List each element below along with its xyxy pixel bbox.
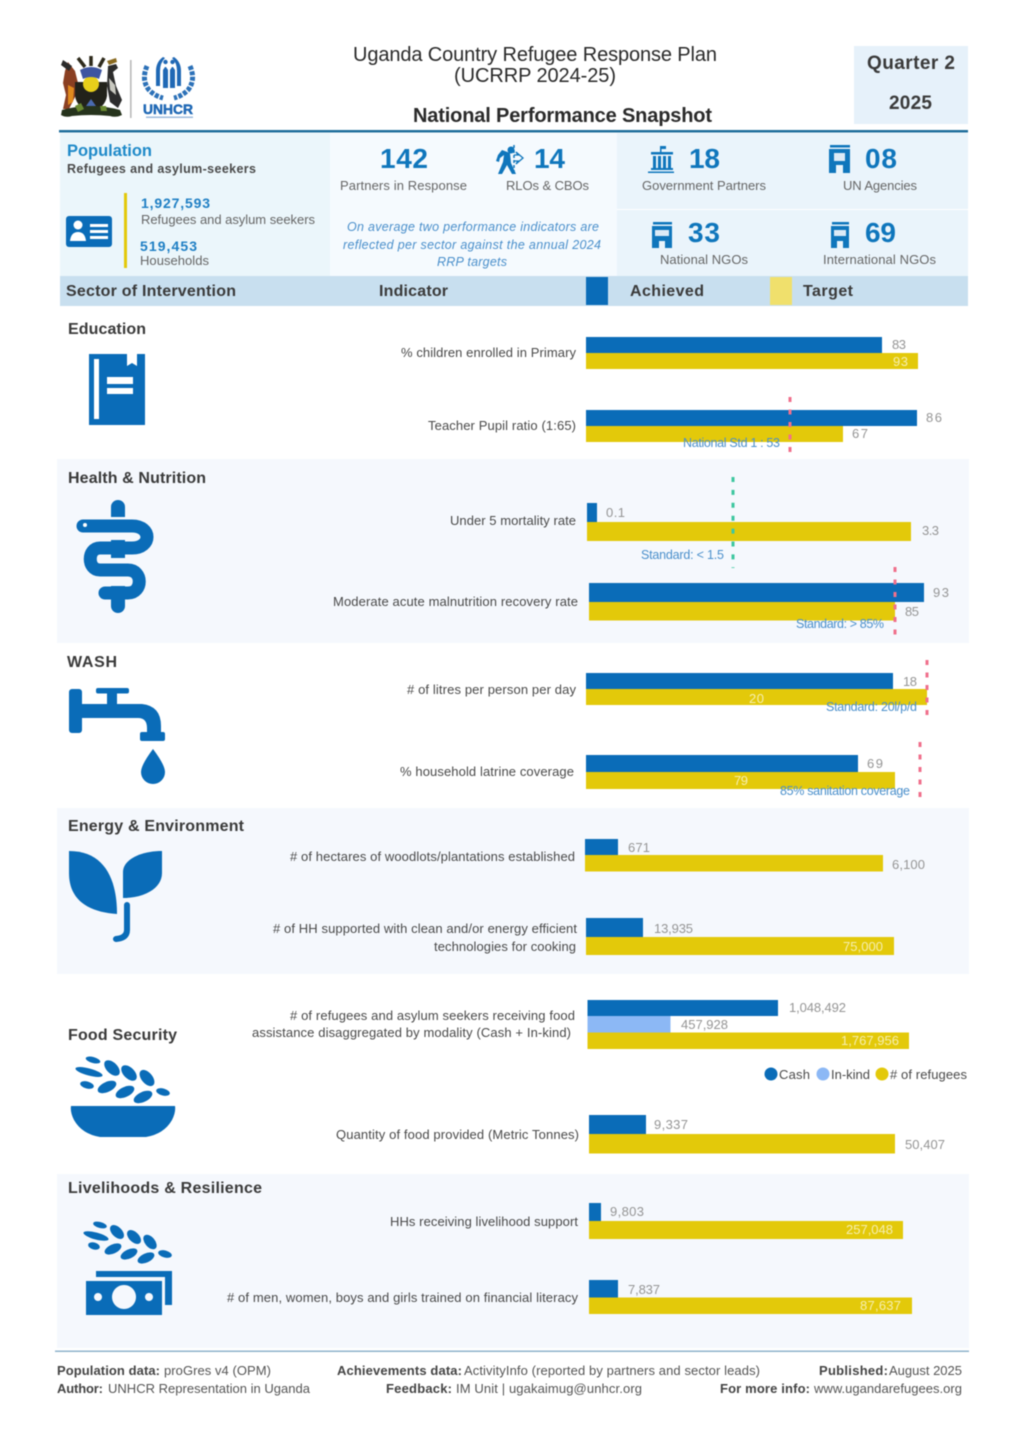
indicator: livelihood support: 9,803 — [610, 1204, 644, 1219]
indicator: clean energy: 75,000 — [843, 939, 883, 954]
footer: Author: — [57, 1381, 103, 1396]
panel: health and nutrition — [57, 459, 969, 643]
panel: population: 1,927,593 — [141, 195, 210, 211]
legend: # of refugees — [890, 1067, 968, 1082]
indicator: malnutrition recovery — [333, 567, 949, 635]
panel: partner types: 33 — [688, 217, 720, 248]
logo wordmark: UNHCR — [143, 101, 193, 117]
indicator: under 5 mortality — [450, 477, 939, 568]
panel: partner types: Government Partners — [642, 178, 766, 193]
indicator: teacher pupil ratio: 86 — [926, 410, 942, 425]
panel: population: Refugees and asylum seekers — [141, 212, 316, 227]
icon: ID card — [66, 216, 112, 247]
panel: population: Households — [140, 253, 210, 268]
panel: partner types: 18 — [689, 143, 720, 174]
indicator: malnutrition recovery: Standard: > 85% — [796, 617, 884, 631]
panel: partner types: International NGOs — [823, 252, 936, 267]
title: Uganda Country Refugee Response Plan — [353, 44, 717, 66]
footer: For more info: — [720, 1381, 810, 1396]
table header strip: Target — [803, 283, 854, 300]
divider between logos — [130, 60, 132, 118]
indicator: financial literacy — [227, 1280, 912, 1314]
panel: population: Refugees and asylum-seekers — [67, 162, 256, 176]
indicator: litres per person: Standard: 20l/p/d — [826, 700, 917, 714]
icon: international NGO building — [831, 222, 849, 248]
indicator: litres per person: # of litres per person per day — [407, 682, 576, 697]
icon: UN building — [829, 145, 850, 173]
panel: WASH: WASH — [67, 654, 117, 671]
icon: runner at signpost — [496, 145, 523, 175]
indicator: livelihood support: HHs receiving livelihood support — [390, 1214, 578, 1229]
indicator: food quantity: 50,407 — [905, 1137, 945, 1152]
indicator: under 5 mortality: Under 5 mortality rate — [450, 513, 576, 528]
panel: partners in response: Partners in Response — [340, 178, 467, 193]
icon: government building — [648, 146, 674, 173]
panel: partners in response: RLOs & CBOs — [506, 178, 590, 193]
indicator: malnutrition recovery: Moderate acute malnutrition recovery rate — [333, 594, 578, 609]
indicator: clean energy — [273, 918, 894, 955]
quarter badge: 2025 — [889, 93, 932, 114]
indicator: food quantity: 9,337 — [654, 1117, 688, 1132]
indicator: teacher pupil ratio: 67 — [852, 426, 868, 441]
indicator: livelihood support: 257,048 — [846, 1222, 893, 1237]
indicator: clean energy: 13,935 — [654, 921, 693, 936]
table header strip: Indicator — [379, 283, 448, 300]
indicator: teacher pupil ratio: Teacher Pupil ratio (1:65) — [428, 418, 576, 433]
table header strip: Sector of Intervention — [66, 283, 236, 300]
logo: UNHCR — [143, 57, 193, 118]
indicator: food assistance recipients: assistance disaggregated by modality (Cash + In-kind) — [252, 1025, 571, 1040]
indicator: clean energy: technologies for cooking — [434, 939, 576, 954]
indicator: woodlots — [290, 839, 925, 872]
indicator: litres per person: 18 — [903, 674, 917, 689]
panel: partners in response — [330, 133, 617, 276]
note: RRP targets — [437, 255, 507, 269]
indicator: litres per person — [407, 660, 927, 715]
panel: partner types: UN Agencies — [843, 178, 918, 193]
title: (UCRRP 2024-25) — [454, 65, 616, 87]
header rule — [59, 130, 968, 132]
icon: bowl with grain — [71, 1055, 175, 1137]
footer: August 2025 — [889, 1363, 962, 1378]
panel: food security: Food Security — [68, 1027, 177, 1044]
indicator: latrine coverage: 85% sanitation coverage — [780, 784, 910, 798]
icon: book — [89, 354, 145, 425]
footer: proGres v4 (OPM) — [164, 1363, 271, 1378]
panel: population: Population — [67, 142, 152, 160]
indicator: food assistance recipients: 457,928 — [681, 1017, 728, 1032]
footer: Feedback: — [386, 1381, 452, 1396]
panel: partners in response: 142 — [380, 143, 428, 174]
panel: food security — [68, 1000, 968, 1154]
title: National Performance Snapshot — [413, 105, 712, 127]
panel: population — [60, 133, 330, 276]
table header strip: Achieved — [630, 283, 704, 300]
indicator: malnutrition recovery: 93 — [933, 585, 949, 600]
icon: leaves — [69, 851, 162, 939]
indicator: litres per person: 20 — [749, 691, 764, 706]
footer: Population data: — [57, 1363, 160, 1378]
footer: UNHCR Representation in Uganda — [108, 1381, 311, 1396]
indicator: children enrolled in primary — [401, 337, 918, 369]
indicator: woodlots: # of hectares of woodlots/plantations established — [290, 849, 575, 864]
title — [353, 44, 717, 127]
indicator: under 5 mortality: Standard: < 1.5 — [641, 548, 724, 562]
note: On average two performance indicators are — [347, 220, 599, 234]
indicator: food quantity: Quantity of food provided (Metric Tonnes) — [336, 1127, 579, 1142]
icon: tap and drop — [69, 688, 165, 784]
indicator: children enrolled in primary: % children enrolled in Primary — [401, 345, 576, 360]
panel: partner types: National NGOs — [660, 252, 748, 267]
indicator: financial literacy: 7,837 — [628, 1282, 660, 1297]
indicator: food assistance recipients — [252, 1000, 909, 1049]
panel: livelihoods and resilience — [57, 1174, 969, 1348]
indicator: latrine coverage: 69 — [867, 756, 883, 771]
indicator: under 5 mortality: 0.1 — [606, 505, 625, 520]
panel: health and nutrition: Health & Nutrition — [68, 470, 206, 487]
icon: grain and money — [83, 1220, 173, 1315]
indicator: food assistance recipients: 1,767,956 — [841, 1033, 899, 1048]
indicator: latrine coverage — [400, 742, 920, 798]
indicator: clean energy: # of HH supported with clean and/or energy efficient — [273, 921, 577, 936]
indicator: food assistance recipients: 1,048,492 — [789, 1000, 846, 1015]
panel: education — [68, 321, 942, 453]
indicator: woodlots: 6,100 — [892, 857, 925, 872]
indicator: financial literacy: 87,637 — [860, 1298, 901, 1313]
indicator: malnutrition recovery: 85 — [905, 604, 919, 619]
indicator: teacher pupil ratio — [428, 397, 942, 453]
legend: Cash — [779, 1067, 810, 1082]
indicator: livelihood support — [390, 1203, 903, 1239]
indicator: teacher pupil ratio: National Std 1 : 53 — [683, 436, 780, 450]
note — [343, 220, 601, 269]
icon: national NGO building — [652, 222, 672, 248]
quarter badge: Quarter 2 — [867, 53, 955, 74]
panel: livelihoods and resilience: Livelihoods & Resilience — [68, 1180, 262, 1197]
panel: energy and environment — [57, 808, 969, 974]
indicator: under 5 mortality: 3.3 — [922, 523, 939, 538]
panel: partner types — [617, 133, 968, 276]
indicator: latrine coverage: % household latrine coverage — [400, 764, 574, 779]
icon: staff and snake — [83, 500, 147, 613]
footer — [55, 1350, 969, 1396]
panel: population: 519,453 — [140, 238, 197, 254]
panel: partner types: 69 — [865, 217, 896, 248]
panel: education: Education — [68, 321, 146, 338]
table header strip — [60, 276, 968, 306]
panel: WASH — [67, 654, 927, 798]
indicator: latrine coverage: 79 — [734, 773, 748, 788]
indicator: woodlots: 671 — [628, 840, 650, 855]
indicator: food quantity — [336, 1115, 945, 1154]
footer: IM Unit | ugakaimug@unhcr.org — [456, 1381, 642, 1396]
panel: partners in response: 14 — [534, 143, 565, 174]
panel: partner types: 08 — [865, 143, 897, 174]
footer: Achievements data: — [337, 1363, 462, 1378]
indicator: food assistance recipients: # of refugees and asylum seekers receiving food — [290, 1008, 575, 1023]
footer: www.ugandarefugees.org — [813, 1381, 962, 1396]
legend — [764, 1067, 968, 1082]
indicator: children enrolled in primary: 93 — [893, 354, 908, 369]
indicator: children enrolled in primary: 83 — [892, 337, 906, 352]
panel: energy and environment: Energy & Environment — [68, 818, 245, 835]
footer: Published: — [819, 1363, 888, 1378]
indicator: financial literacy: # of men, women, boys and girls trained on financial literacy — [227, 1290, 578, 1305]
legend: In-kind — [831, 1067, 870, 1082]
quarter badge — [854, 46, 968, 124]
footer: ActivityInfo (reported by partners and sector leads) — [464, 1363, 760, 1378]
note: reflected per sector against the annual 2024 — [343, 238, 601, 252]
logo: Uganda coat of arms — [61, 56, 122, 117]
